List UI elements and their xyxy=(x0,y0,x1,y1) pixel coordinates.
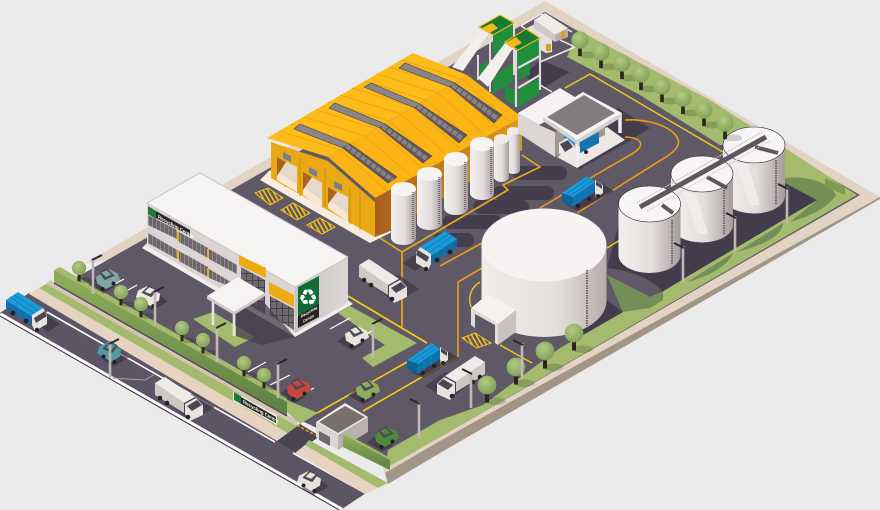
street sign: Recycling Centre xyxy=(243,399,279,425)
trees xyxy=(72,31,742,405)
hedge lower xyxy=(343,434,390,470)
conveyor tower front xyxy=(478,29,540,107)
silo shadows xyxy=(440,173,560,240)
road xyxy=(0,293,366,510)
hatched pads xyxy=(255,188,491,348)
entrance canopy xyxy=(207,277,265,336)
tank three xyxy=(723,127,785,214)
grass patch canopy xyxy=(193,312,255,347)
tank one xyxy=(618,186,680,273)
barrier xyxy=(297,425,315,435)
cars xyxy=(88,268,399,495)
office end wall xyxy=(295,257,348,333)
warehouse vent windows xyxy=(283,152,342,191)
curb xyxy=(46,280,297,426)
service canopy building xyxy=(518,88,625,168)
tower ground shadow xyxy=(525,60,570,90)
warehouse roof seams xyxy=(279,60,509,191)
service building roof xyxy=(518,88,583,125)
warehouse roof left slope xyxy=(267,53,467,157)
warehouse front wall xyxy=(271,142,375,237)
gatehouse xyxy=(316,403,368,450)
office yellow accents xyxy=(177,232,294,307)
warehouse side wall xyxy=(375,117,522,237)
small rear buildings xyxy=(527,13,568,53)
silos xyxy=(391,127,520,245)
office roof xyxy=(147,173,348,287)
conveyor tower rear xyxy=(452,15,514,93)
truck under canopy xyxy=(559,131,599,161)
office glass front xyxy=(241,267,294,330)
walkway over tanks xyxy=(637,132,778,213)
warehouse roof right slope xyxy=(328,75,522,198)
canopy ground shadow xyxy=(578,108,650,170)
sign: end wall xyxy=(298,276,319,328)
canopy roof xyxy=(543,92,622,140)
entrance xyxy=(277,424,320,453)
tank two xyxy=(671,156,733,243)
hedge far right xyxy=(825,178,845,195)
office plinth xyxy=(142,243,353,337)
asphalt yard xyxy=(72,12,860,462)
grass wedge near gate xyxy=(287,400,318,424)
warehouse skylights xyxy=(294,63,502,183)
shaded grass xyxy=(607,177,836,312)
sign: end wall: ♻ xyxy=(298,285,318,310)
sign: end wall: Recycling xyxy=(301,304,318,319)
parking shadow xyxy=(236,300,295,345)
warehouse xyxy=(260,53,522,243)
office long wall xyxy=(147,203,295,333)
sidewalk lower xyxy=(295,445,378,494)
grass border xyxy=(385,148,857,469)
big digester tank xyxy=(471,208,606,345)
lamp cable xyxy=(112,374,155,380)
grass top right xyxy=(567,30,785,148)
canopy slab xyxy=(557,127,625,168)
service building wall xyxy=(518,113,555,157)
office building xyxy=(142,173,353,337)
tank entrance xyxy=(471,294,516,324)
trucks xyxy=(6,176,614,421)
tank shadow xyxy=(607,183,817,297)
road markings xyxy=(317,14,723,413)
canopy posts xyxy=(577,113,620,167)
green strip lower xyxy=(305,440,388,488)
office windows xyxy=(148,215,237,287)
grass patch parking xyxy=(338,306,417,367)
parking bays xyxy=(107,279,372,398)
service interior xyxy=(555,108,605,157)
warehouse pad xyxy=(260,170,392,243)
sign: rooftop band xyxy=(148,206,194,240)
hedge upper xyxy=(54,267,287,416)
warehouse doors xyxy=(277,157,348,222)
sidewalk upper xyxy=(29,288,289,441)
sign: end wall: Centre xyxy=(303,312,315,324)
skylight panes xyxy=(346,85,498,180)
lamps xyxy=(92,184,788,438)
big tank shadow xyxy=(560,295,623,335)
sign: rooftop band: Recycling Centre xyxy=(158,214,194,240)
street sign xyxy=(233,391,279,425)
green strip upper xyxy=(39,283,300,434)
